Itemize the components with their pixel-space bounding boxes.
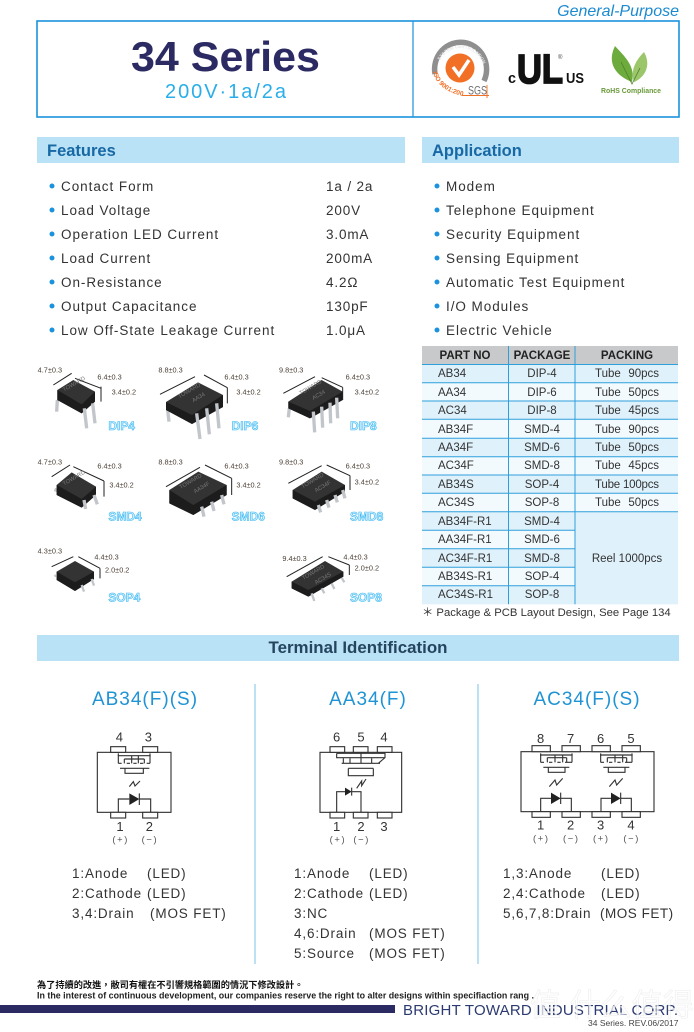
ordering table: SOP-4 xyxy=(525,571,560,583)
package: DIP4: 4.7±0.3 xyxy=(38,366,62,375)
section bar: Terminal Identification: Terminal Identification xyxy=(268,639,448,657)
terminal column: AB34: 1:Anode xyxy=(72,866,128,881)
ordering table: Tube xyxy=(595,442,621,454)
circuit: AC34 xyxy=(521,731,654,844)
ordering table: 50pcs xyxy=(628,387,659,399)
package: SMD8: 6.4±0.3 xyxy=(346,462,370,471)
footer bar and company name: BRIGHT TOWARD INDUSTRIAL CORP. xyxy=(403,1002,678,1019)
ordering table: Tube 100pcs xyxy=(595,479,659,491)
footer notice xyxy=(37,979,534,1002)
circuit: AC34: 2 xyxy=(567,818,574,833)
heading: Application: Application xyxy=(432,142,522,160)
panel: application: I/O Modules xyxy=(446,299,529,314)
circuit: AB34: 4 xyxy=(116,729,123,744)
terminal column: AC34: (LED) xyxy=(601,886,641,901)
package: SMD4 xyxy=(38,458,142,524)
terminal column: AA34: AA34(F) xyxy=(329,689,407,710)
ordering table: 45pcs xyxy=(628,460,659,472)
ordering table: Tube xyxy=(595,387,621,399)
circuit: AA34: (−) xyxy=(353,835,370,845)
panel: features: 1a / 2a xyxy=(326,179,373,194)
package: SOP4: 2.0±0.2 xyxy=(105,566,129,575)
logo: RoHS leaves xyxy=(601,46,661,95)
terminal column: AC34: (LED) xyxy=(601,866,641,881)
logo: cULus: ® xyxy=(558,54,563,61)
panel: application: Electric Vehicle xyxy=(446,323,553,338)
ordering table: PART NO xyxy=(440,350,490,362)
panel: application: Telephone Equipment xyxy=(446,203,595,218)
circuit: AC34: 4 xyxy=(627,818,635,833)
panel: features: Load Current xyxy=(61,251,151,266)
panel: features: Operation LED Current xyxy=(61,227,219,242)
package: SMD8: 3.4±0.2 xyxy=(355,478,379,487)
circuit: AC34: 8 xyxy=(537,731,544,746)
package: DIP8: 6.4±0.3 xyxy=(346,373,370,382)
ordering table: PACKING xyxy=(601,350,653,362)
terminal column: AA34: 4,6:Drain xyxy=(294,926,356,941)
logo: ISO 9001 SGS: SGS xyxy=(468,84,487,98)
package: SMD6: AA34F xyxy=(193,481,211,495)
package: DIP6: 8.8±0.3 xyxy=(158,366,183,375)
ordering table: AC34S xyxy=(438,497,475,509)
package: SMD6: TOWARD xyxy=(179,473,203,491)
package: SMD6: 8.8±0.3 xyxy=(158,458,183,467)
circuit: AC34: 1 xyxy=(537,818,544,833)
circuit: AA34: 6 xyxy=(333,729,340,744)
circuit: AB34 xyxy=(97,729,171,845)
panel: features: On-Resistance xyxy=(61,275,163,290)
package: DIP6: AA34 xyxy=(191,392,206,404)
ordering table: AC34S-R1 xyxy=(438,589,493,601)
logo: cULus: UL xyxy=(517,46,563,92)
footer notice: In the interest of continuous development, our companies reserve the right to alter designs within specifiaction rang . xyxy=(37,990,534,1002)
ordering table: 50pcs xyxy=(628,497,659,509)
package: SMD8: TOWARD xyxy=(301,472,325,490)
panel: features xyxy=(37,137,405,338)
package: DIP4: TOWARD xyxy=(62,376,87,393)
terminal column: AC34: 5,6,7,8:Drain xyxy=(503,906,591,921)
ordering table: AB34F-R1 xyxy=(438,516,492,528)
package: SOP8: 4.4±0.3 xyxy=(343,553,368,562)
package: SOP4 xyxy=(38,547,141,605)
circuit: AB34: 3 xyxy=(145,729,152,744)
panel: application: Sensing Equipment xyxy=(446,251,579,266)
section bar: Terminal Identification xyxy=(37,635,679,661)
package: SMD4: TOWARD xyxy=(62,470,87,487)
package: SOP8 xyxy=(282,553,382,605)
package: SMD4: SMD4 xyxy=(108,510,142,524)
package: DIP4: 6.4±0.3 xyxy=(97,373,122,382)
package: DIP8: TOWARD xyxy=(299,379,323,397)
ordering table: Tube xyxy=(595,460,621,472)
ordering table: 90pcs xyxy=(628,424,659,436)
package: DIP8 xyxy=(279,366,379,433)
terminal column: AA34: 2:Cathode xyxy=(294,886,364,901)
terminal column: AC34: 1,3:Anode xyxy=(503,866,572,881)
terminal column: AA34: (MOS FET) xyxy=(369,926,446,941)
terminal column: AA34: 1:Anode xyxy=(294,866,350,881)
ordering table: SOP-8 xyxy=(525,589,559,601)
terminal column: AB34: AB34(F)(S) xyxy=(92,689,198,710)
package: DIP4 xyxy=(38,366,136,433)
terminal column: AC34 xyxy=(503,689,674,921)
terminal column: AB34: 2:Cathode xyxy=(72,886,142,901)
package: DIP8: 9.8±0.3 xyxy=(279,366,303,375)
terminal column: AA34 xyxy=(294,689,446,961)
ordering table: SMD-4 xyxy=(524,516,560,528)
ordering table: AB34S-R1 xyxy=(438,571,492,583)
circuit: AB34: (−) xyxy=(142,835,158,845)
circuit: AC34: 7 xyxy=(567,731,574,746)
circuit: AA34: (+) xyxy=(330,835,346,845)
circuit: AC34: 5 xyxy=(627,731,635,746)
ordering table: AC34F-R1 xyxy=(438,553,492,565)
panel: features: 130pF xyxy=(326,299,369,314)
package: DIP8: 3.4±0.2 xyxy=(355,388,379,397)
package: SMD8 xyxy=(279,458,384,524)
package: DIP6: DIP6 xyxy=(232,419,259,433)
heading: Features: Features xyxy=(47,142,116,160)
panel: features: Low Off-State Leakage Current xyxy=(61,323,275,338)
panel: features: Contact Form xyxy=(61,179,154,194)
terminal column: AA34: (LED) xyxy=(369,866,409,881)
package: SMD4: 3.4±0.2 xyxy=(109,480,134,489)
ordering table: DIP-8 xyxy=(527,405,557,417)
ordering table: AA34F xyxy=(438,442,473,454)
panel: features: 1.0μA xyxy=(326,323,366,338)
terminal column: AA34: (MOS FET) xyxy=(369,946,446,961)
ordering table: AB34F xyxy=(438,424,473,436)
header panel xyxy=(36,20,680,118)
circuit: AC34: (−) xyxy=(563,834,580,844)
panel: features: 3.0mA xyxy=(326,227,369,242)
ordering table: AB34S xyxy=(438,479,474,491)
terminal column: AA34: (LED) xyxy=(369,886,409,901)
ordering table: SOP-4 xyxy=(525,479,560,491)
terminal column: AB34: 3,4:Drain xyxy=(72,906,134,921)
package: SOP8: 2.0±0.2 xyxy=(355,564,379,573)
package: SMD6: 6.4±0.3 xyxy=(224,462,249,471)
panel: features: Load Voltage xyxy=(61,203,151,218)
ordering table: SMD-8 xyxy=(524,460,560,472)
panel: features: 4.2Ω xyxy=(326,275,358,290)
ordering table xyxy=(422,346,678,604)
ordering table: DIP-6 xyxy=(527,387,557,399)
circuit: AC34: 6 xyxy=(597,731,604,746)
package: SMD6: SMD6 xyxy=(232,510,265,524)
ordering table: DIP-4 xyxy=(527,368,557,380)
ordering table: Tube xyxy=(595,405,621,417)
package: DIP6: TOWARD xyxy=(177,382,202,400)
package: SOP8: 9.4±0.3 xyxy=(282,554,307,563)
panel: application: Security Equipment xyxy=(446,227,580,242)
package: DIP6: 3.4±0.2 xyxy=(236,388,261,397)
footer bar and company name xyxy=(0,1002,678,1019)
ordering table: AA34F-R1 xyxy=(438,534,492,546)
terminal column: AC34: 2,4:Cathode xyxy=(503,886,586,901)
logo: ISO 9001 SGS xyxy=(432,40,490,98)
circuit: AC34: (−) xyxy=(623,834,640,844)
ordering table: Reel 1000pcs xyxy=(592,553,662,565)
ordering table: SMD-8 xyxy=(524,553,560,565)
circuit: AA34: 2 xyxy=(357,819,365,834)
logo: RoHS leaves: RoHS Compliance xyxy=(601,86,661,95)
logo: cULus: c xyxy=(508,70,516,87)
column dividers xyxy=(255,684,478,964)
package: DIP8: DIP8 xyxy=(350,419,377,433)
circuit: AA34: 1 xyxy=(333,819,340,834)
table footnote: ＊ Package & PCB Layout Design, See Page 134 xyxy=(422,607,671,619)
terminal column: AA34: 5:Source xyxy=(294,946,355,961)
package: SOP4: 4.3±0.3 xyxy=(38,547,62,556)
package drawings xyxy=(38,366,384,605)
package: SMD8: AC34F xyxy=(314,480,333,494)
terminal column: AB34 xyxy=(72,689,227,921)
circuit: AA34: 3 xyxy=(380,819,388,834)
ordering table: AA34 xyxy=(438,387,467,399)
ordering table: 90pcs xyxy=(628,368,659,380)
ordering table: SMD-6 xyxy=(524,534,560,546)
subtitle: 200V·1a/2a xyxy=(165,81,287,103)
circuit: AC34: 3 xyxy=(597,818,604,833)
package: DIP8: AC34 xyxy=(311,389,327,402)
ordering table: Tube xyxy=(595,497,621,509)
ordering table: SMD-6 xyxy=(524,442,560,454)
panel: application xyxy=(422,137,679,338)
package: SOP4: SOP4 xyxy=(108,591,141,605)
package: SMD8: 9.8±0.3 xyxy=(279,458,303,467)
package: DIP6 xyxy=(158,366,261,439)
package: SMD4: 6.4±0.3 xyxy=(97,462,122,471)
circuit: AB34: 2 xyxy=(146,819,153,834)
package: SMD6: 3.4±0.2 xyxy=(236,480,261,489)
ordering table: SOP-8 xyxy=(525,497,559,509)
panel: features: Output Capacitance xyxy=(61,299,197,314)
package: SOP4: 4.4±0.3 xyxy=(94,553,119,562)
package: DIP6: 6.4±0.3 xyxy=(224,373,249,382)
logo: ISO 9001 SGS: SYSTEM CERTIFICATION xyxy=(438,45,486,64)
title: 34 Series xyxy=(131,33,320,80)
package: SOP8: TOWARD xyxy=(301,564,326,582)
ordering table: SMD-4 xyxy=(524,424,560,436)
circuit: AA34: 5 xyxy=(357,729,365,744)
circuit: AA34 xyxy=(320,729,402,845)
panel: application: Automatic Test Equipment xyxy=(446,275,625,290)
package: SMD4: 4.7±0.3 xyxy=(38,458,62,467)
ordering table: PACKAGE xyxy=(514,350,571,362)
ordering table: AB34 xyxy=(438,368,467,380)
package: SMD8: SMD8 xyxy=(350,510,384,524)
panel: features: 200mA xyxy=(326,251,373,266)
terminal column: AB34: (LED) xyxy=(147,886,187,901)
footer notice: 為了持續的改進，敝司有權在不引響規格範圍的情況下修改設計。 xyxy=(37,979,303,990)
terminal column: AB34: (LED) xyxy=(147,866,187,881)
circuit: AC34: (+) xyxy=(593,834,610,844)
revision note: 34 Series. REV.06/2017 xyxy=(588,1018,679,1028)
terminal column: AB34: (MOS FET) xyxy=(150,906,227,921)
circuit: AA34: 4 xyxy=(380,729,388,744)
ordering table: 50pcs xyxy=(628,442,659,454)
panel: application: Modem xyxy=(446,179,496,194)
package: DIP4: DIP4 xyxy=(108,419,135,433)
package: SOP8: AC34S xyxy=(314,572,333,586)
terminal column: AA34: 3:NC xyxy=(294,906,328,921)
ordering table: Tube xyxy=(595,424,621,436)
logo: cULus: US xyxy=(566,71,584,87)
ordering table: AC34 xyxy=(438,405,467,417)
terminal column: AC34: AC34(F)(S) xyxy=(533,689,641,710)
package: SMD6 xyxy=(158,458,265,524)
package: SOP8: SOP8 xyxy=(350,591,382,605)
circuit: AB34: 1 xyxy=(116,819,124,834)
ordering table: AC34F xyxy=(438,460,474,472)
circuit: AC34: (+) xyxy=(533,834,550,844)
tagline: General-Purpose: General-Purpose xyxy=(557,3,679,20)
circuit: AB34: (+) xyxy=(112,835,129,845)
ordering table: 45pcs xyxy=(628,405,659,417)
panel: features: 200V xyxy=(326,203,361,218)
package: DIP4: 3.4±0.2 xyxy=(112,388,136,397)
ordering table: Tube xyxy=(595,368,621,380)
terminal column: AC34: (MOS FET) xyxy=(600,906,674,921)
